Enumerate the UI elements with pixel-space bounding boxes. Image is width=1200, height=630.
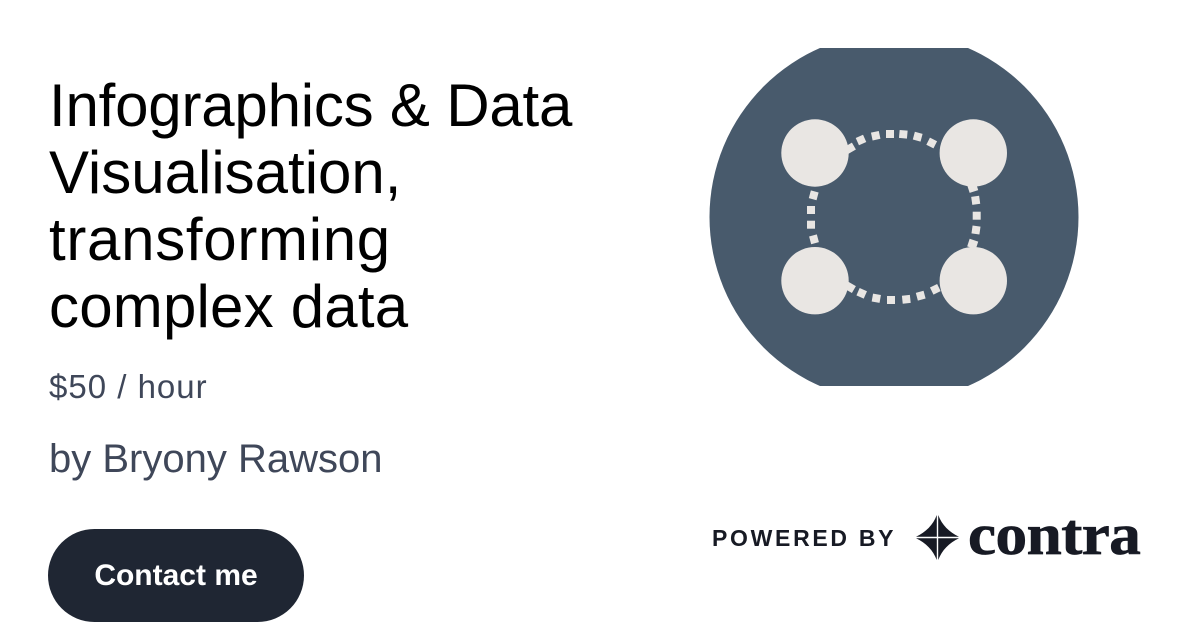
contra wordmark: contra <box>968 502 1140 567</box>
icon: contra star <box>916 515 959 560</box>
price: $50 / hour <box>49 368 208 405</box>
title: Visualisation, <box>49 139 401 206</box>
background circle <box>710 32 1078 402</box>
title <box>49 72 572 340</box>
nodes <box>781 119 1007 314</box>
contact button: Contact me <box>94 559 258 592</box>
powered by label: POWERED BY <box>712 525 896 551</box>
dashed ring <box>807 130 981 304</box>
author: by Bryony Rawson <box>49 437 382 481</box>
illustration: network of four nodes in a circle <box>710 48 1078 386</box>
title: Infographics & Data <box>49 72 572 139</box>
contact button <box>48 529 304 622</box>
title: complex data <box>49 273 408 340</box>
title: transforming <box>49 206 391 273</box>
